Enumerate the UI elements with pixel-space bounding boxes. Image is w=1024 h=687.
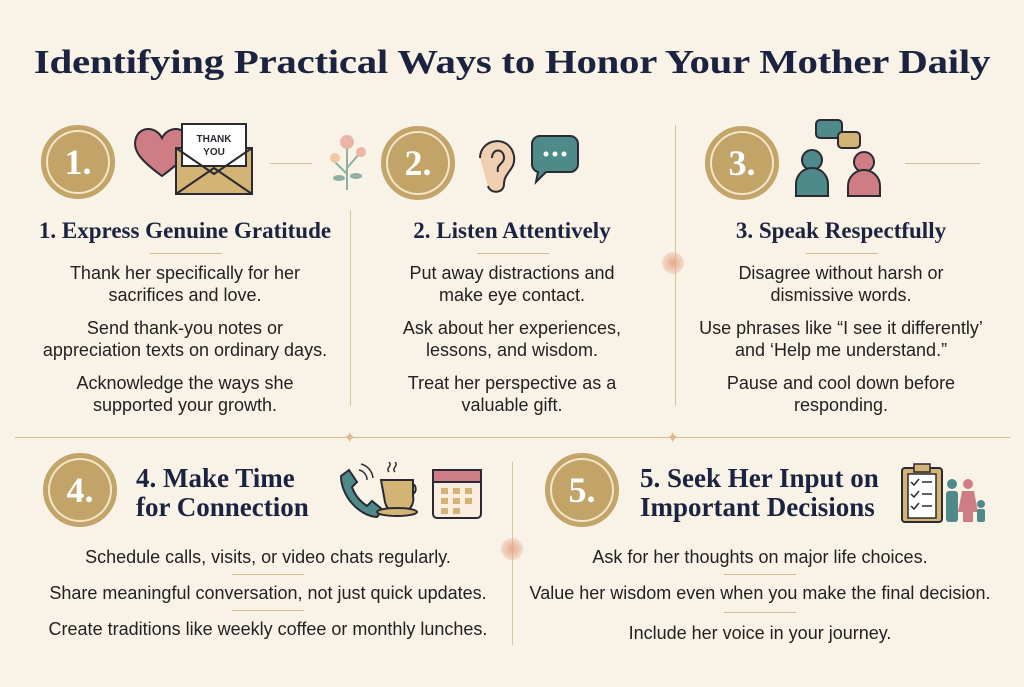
divider lines (350, 210, 351, 406)
text block 3: dismissive words. Use phrases like “I see it differently’ (699, 285, 983, 338)
icon: heart and thank you envelope (134, 123, 253, 195)
text block 2: lessons, and wisdom. Treat her perspective as a (408, 340, 616, 393)
panel: speak (699, 218, 983, 415)
text block 3: and ‘Help me understand.” Pause and cool down before (727, 340, 955, 393)
circle 1: 1. (64, 142, 92, 182)
icon: clipboard and family (901, 463, 985, 523)
circle 4: 4. (66, 470, 94, 510)
text block 4: Schedule calls, visits, or video chats regularly. Share meaningful conversation, not just quick updates. Create traditions like weekly coffee or monthly lunches. (49, 547, 487, 639)
icon: heart and thank you envelope: THANK (196, 134, 232, 145)
sparkle: left: ✦ (343, 430, 356, 447)
icon: heart and thank you envelope: YOU (203, 147, 225, 158)
sparkle: center top (662, 252, 684, 274)
icon: two people talking (795, 119, 881, 197)
circle 4 (43, 453, 117, 527)
icon: flower (330, 135, 366, 190)
circle 2 (381, 126, 455, 200)
panel: listen (403, 218, 621, 415)
text block 2: valuable gift. (461, 395, 563, 415)
text block 2 (403, 263, 621, 415)
heading 1: 1. Express Genuine Gratitude (39, 218, 331, 243)
circle 5: 5. (568, 470, 596, 510)
icon: ear and speech bubble (479, 135, 579, 193)
heading 5: 5. Seek Her Input on (640, 463, 879, 493)
circle 2: 2. (404, 143, 432, 183)
text block 1: supported your growth. (93, 395, 277, 415)
text block 2: Put away distractions and (409, 263, 615, 283)
heading 3: 3. Speak Respectfully (736, 218, 946, 243)
text block 5: Ask for her thoughts on major life choices. Value her wisdom even when you make the final decision. Include her voice in your journey. (530, 547, 990, 643)
text block 3: Disagree without harsh or (738, 263, 944, 283)
text block 1: Thank her specifically for her (70, 263, 300, 283)
sparkle: right: ✦ (666, 430, 679, 447)
circle 5 (545, 453, 619, 527)
heading 4 (136, 463, 309, 522)
text block 3: responding. (794, 395, 888, 415)
text block 1 (43, 263, 327, 415)
text block 1: appreciation texts on ordinary days. Acknowledge the ways she (43, 340, 327, 393)
panel: gratitude (39, 218, 331, 415)
text block 1: sacrifices and love. Send thank-you notes or (87, 285, 283, 338)
heading 4: 4. Make Time (136, 463, 295, 493)
heading 2: 2. Listen Attentively (413, 218, 611, 243)
text block 2: make eye contact. Ask about her experiences, (403, 285, 621, 338)
sparkle: center bottom (501, 538, 523, 560)
icons: phone, coffee, calendar (340, 462, 482, 519)
text block 3 (699, 263, 983, 415)
circle 1 (41, 125, 115, 199)
heading 5: Important Decisions (640, 492, 875, 522)
heading 4: for Connection (136, 492, 309, 522)
heading 5 (640, 463, 879, 522)
circle 3 (705, 126, 779, 200)
title: Identifying Practical Ways to Honor Your Mother Daily (34, 44, 990, 81)
circle 3: 3. (728, 143, 756, 183)
